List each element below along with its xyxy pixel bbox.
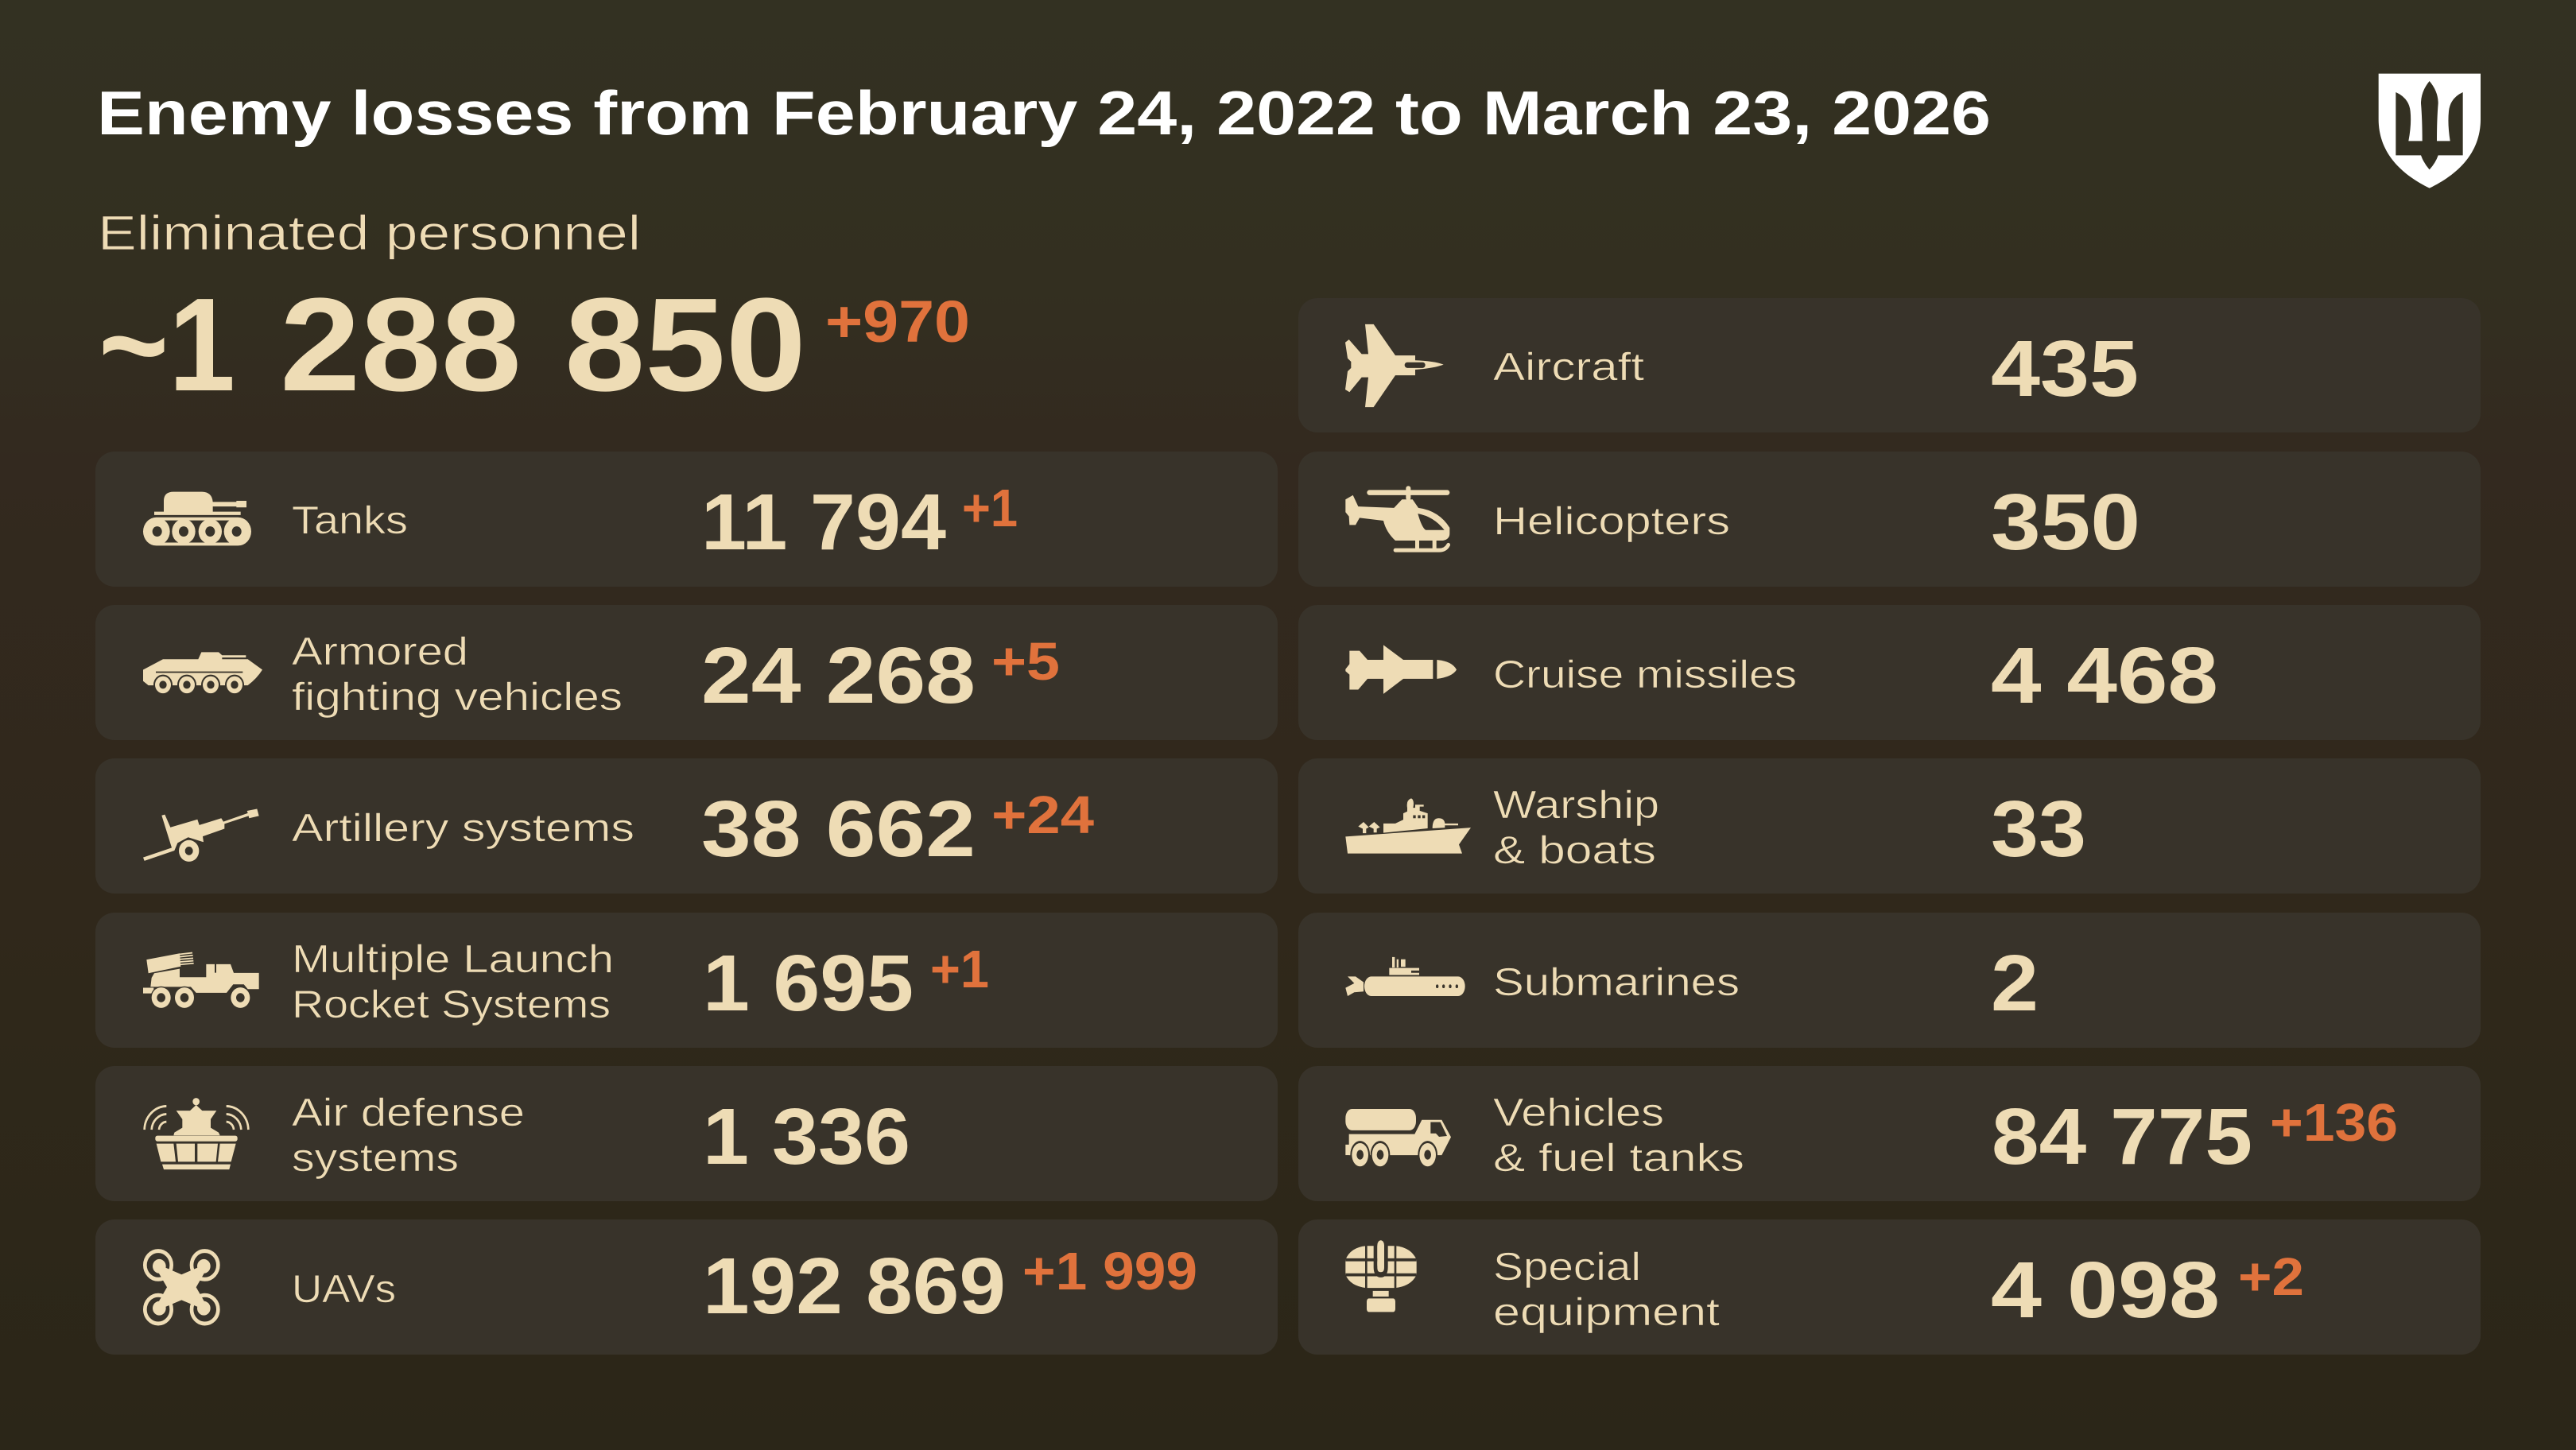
label: Submarines (1493, 961, 1740, 1004)
label (292, 630, 623, 719)
panel: vehicles and fuel tanks (1298, 1066, 2481, 1201)
value: 38 662 (701, 785, 976, 874)
value: 350 (1991, 478, 2140, 567)
label: Multiple Launch (292, 938, 614, 981)
icon: helicopter (1345, 486, 1449, 550)
value: 4 468 (1991, 631, 2218, 720)
value: 1 336 (703, 1092, 910, 1181)
icon: tank (143, 492, 251, 545)
label (292, 1091, 525, 1180)
value: 192 869 (703, 1242, 1006, 1331)
icon: air defense (145, 1098, 248, 1169)
daily change: +1 (930, 940, 989, 999)
label: Warship (1493, 784, 1659, 827)
label: Helicopters (1493, 500, 1730, 543)
label: Vehicles (1493, 1091, 1664, 1134)
label: Special (1493, 1246, 1641, 1289)
label: Rocket Systems (292, 983, 611, 1026)
icon: drone (145, 1251, 218, 1324)
personnel daily change: +970 (825, 289, 970, 355)
panel: tanks (95, 452, 1278, 587)
label: & boats (1493, 829, 1656, 872)
daily change: +24 (991, 785, 1094, 845)
label: Armored (292, 630, 468, 673)
label: systems (292, 1137, 459, 1180)
label (292, 938, 614, 1026)
panel: special equipment (1298, 1219, 2481, 1355)
label: Aircraft (1493, 346, 1644, 389)
panel: aircraft (1298, 298, 2481, 432)
icon: rocket launcher truck (143, 953, 259, 1009)
personnel total: 850 (564, 271, 806, 419)
value: 4 098 (1991, 1246, 2220, 1335)
icon: cruise missile (1345, 645, 1457, 694)
label (1493, 1246, 1720, 1334)
value: 84 775 (1992, 1092, 2252, 1181)
daily change: +1 (962, 479, 1018, 538)
title: Enemy losses from February 24, 2022 to March 23, 2026 (97, 78, 1991, 148)
daily change: +2 (2238, 1247, 2304, 1307)
daily change: +136 (2270, 1093, 2398, 1153)
panel: warships and boats (1298, 758, 2481, 894)
label (1493, 784, 1659, 872)
value: 1 695 (703, 939, 914, 1028)
personnel total: ~1 (99, 271, 235, 419)
icon: warship (1345, 798, 1471, 854)
panel: submarines (1298, 913, 2481, 1048)
panel: cruise missiles (1298, 605, 2481, 740)
label: equipment (1493, 1291, 1720, 1334)
panel: armored fighting vehicles (95, 605, 1278, 740)
label: & fuel tanks (1493, 1137, 1744, 1180)
panel: helicopters (1298, 452, 2481, 587)
label: UAVs (292, 1268, 396, 1311)
panel: UAVs (95, 1219, 1278, 1355)
value: 24 268 (701, 631, 976, 720)
daily change: +5 (991, 632, 1060, 692)
value: 11 794 (701, 478, 946, 567)
icon: radar (1345, 1240, 1417, 1312)
label: fighting vehicles (292, 676, 623, 719)
value: 435 (1991, 324, 2139, 413)
label: Tanks (292, 499, 408, 542)
label (1493, 1091, 1744, 1180)
icon: fuel truck (1345, 1109, 1451, 1169)
personnel total: 288 (280, 271, 522, 419)
label: Air defense (292, 1091, 525, 1134)
daily change: +1 999 (1022, 1242, 1197, 1301)
personnel total (99, 271, 806, 419)
icon: artillery (143, 808, 259, 863)
icon: trident shield logo (2379, 74, 2481, 188)
value: 33 (1991, 785, 2086, 874)
icon: aircraft (1345, 324, 1444, 407)
panel: artillery systems (95, 758, 1278, 894)
icon: submarine (1345, 957, 1465, 996)
value: 2 (1991, 939, 2039, 1028)
label: Artillery systems (292, 807, 634, 850)
panel: air defense systems (95, 1066, 1278, 1201)
panel: multiple launch rocket systems (95, 913, 1278, 1048)
label: Cruise missiles (1493, 653, 1797, 696)
icon: armored vehicle (143, 652, 262, 695)
subtitle: eliminated personnel: Eliminated personnel (98, 206, 641, 260)
